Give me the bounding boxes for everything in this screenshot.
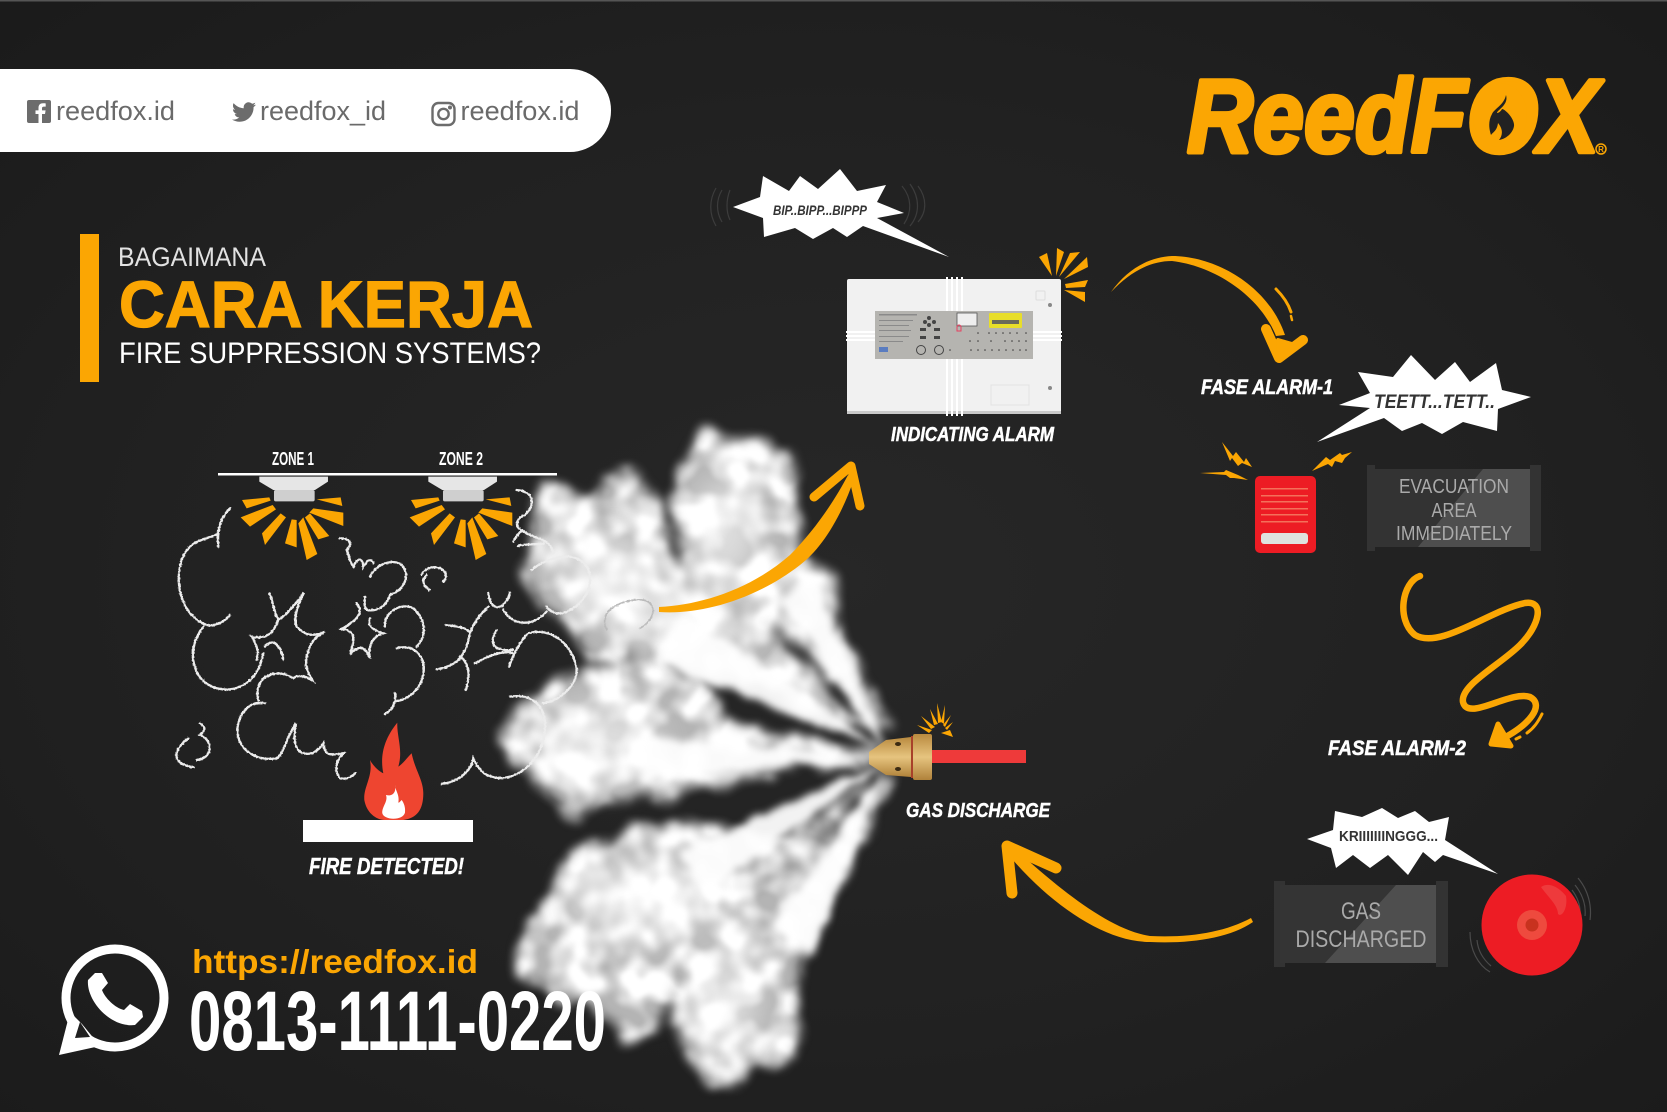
icon: whatsapp	[59, 949, 164, 1055]
chalk smoke clouds	[176, 490, 653, 784]
label: indicating alarm: INDICATING ALARM	[891, 424, 1055, 446]
sign: gas discharged	[1274, 881, 1448, 967]
icon: alarm bell	[1470, 874, 1590, 976]
heading: cara kerja: CARA KERJA	[119, 267, 533, 341]
text: twitter handle: reedfox_id	[260, 96, 386, 126]
icon: facebook	[27, 100, 51, 123]
sign: evacuation area immediately	[1367, 465, 1541, 551]
text: instagram handle: reedfox.id	[460, 96, 580, 126]
sign: gas discharged: GAS	[1341, 898, 1381, 925]
icon: lightning sparks	[1200, 442, 1352, 480]
detector 1	[241, 477, 343, 560]
speech bubble: bip	[711, 169, 949, 257]
icon: twitter	[232, 102, 256, 122]
label: fire detected: FIRE DETECTED!	[309, 853, 464, 879]
sign: evacuation area immediately: IMMEDIATELY	[1396, 523, 1512, 545]
speech bubble: teett	[1317, 355, 1531, 442]
social media bar	[0, 69, 611, 152]
label: zone 2: ZONE 2	[439, 449, 483, 469]
speech bubble: bip: BIP..BIPP...BIPPP	[773, 202, 868, 218]
label: fase alarm 1: FASE ALARM-1	[1201, 376, 1333, 399]
solid O centre	[1473, 83, 1527, 147]
label: gas discharge: GAS DISCHARGE	[906, 800, 1051, 822]
ceiling line	[218, 473, 557, 476]
contact block	[59, 943, 606, 1068]
orange accent bar	[80, 234, 99, 382]
detector 2	[410, 477, 512, 560]
arrow: s-curve to fase alarm 2	[1403, 576, 1542, 746]
sign: evacuation area immediately: EVACUATION	[1399, 476, 1509, 498]
registered mark: R	[1598, 145, 1604, 154]
icon: red alarm strobe	[1255, 476, 1316, 553]
title block	[80, 234, 541, 382]
logo: ReedFOX: ReedFOX	[1187, 59, 1604, 175]
arrow: bell to gas discharge	[1006, 846, 1253, 942]
speech bubble: kriiing: KRIIIIIIINGGG...	[1339, 828, 1438, 845]
text: facebook handle: reedfox.id	[56, 96, 175, 126]
nozzle sparks	[917, 703, 953, 737]
icon: fire	[364, 723, 423, 820]
arrow: panel to fase alarm 1	[1111, 256, 1303, 358]
control keypad	[875, 311, 1033, 359]
red pipe	[932, 750, 1026, 763]
heading: fire suppression systems: FIRE SUPPRESSION SYSTEMS?	[119, 337, 541, 370]
registered mark	[1596, 144, 1606, 154]
zone detectors	[218, 449, 557, 560]
smoke cloud from gas discharge	[504, 431, 893, 1086]
sign: evacuation area immediately: AREA	[1432, 500, 1477, 522]
sign: gas discharged: DISCHARGED	[1296, 926, 1426, 953]
phone number: 0813-1111-0220	[189, 974, 606, 1068]
label: fase alarm 2: FASE ALARM-2	[1328, 737, 1466, 760]
arrow: smoke to indicating alarm	[659, 466, 860, 612]
label: zone 1: ZONE 1	[272, 449, 314, 469]
fire base	[303, 820, 473, 842]
heading: bagaimana: BAGAIMANA	[118, 242, 266, 272]
speech bubble: teett: TEETT...TETT..	[1374, 392, 1495, 413]
control panel: indicating alarm	[846, 277, 1062, 416]
nozzle with pipe	[869, 703, 1026, 780]
alert rays: panel	[1039, 248, 1088, 302]
icon: flame in O	[1489, 95, 1514, 140]
icon: instagram	[432, 103, 454, 125]
website url: https://reedfox.id	[192, 943, 478, 980]
speech bubble: kriiing	[1307, 808, 1498, 875]
